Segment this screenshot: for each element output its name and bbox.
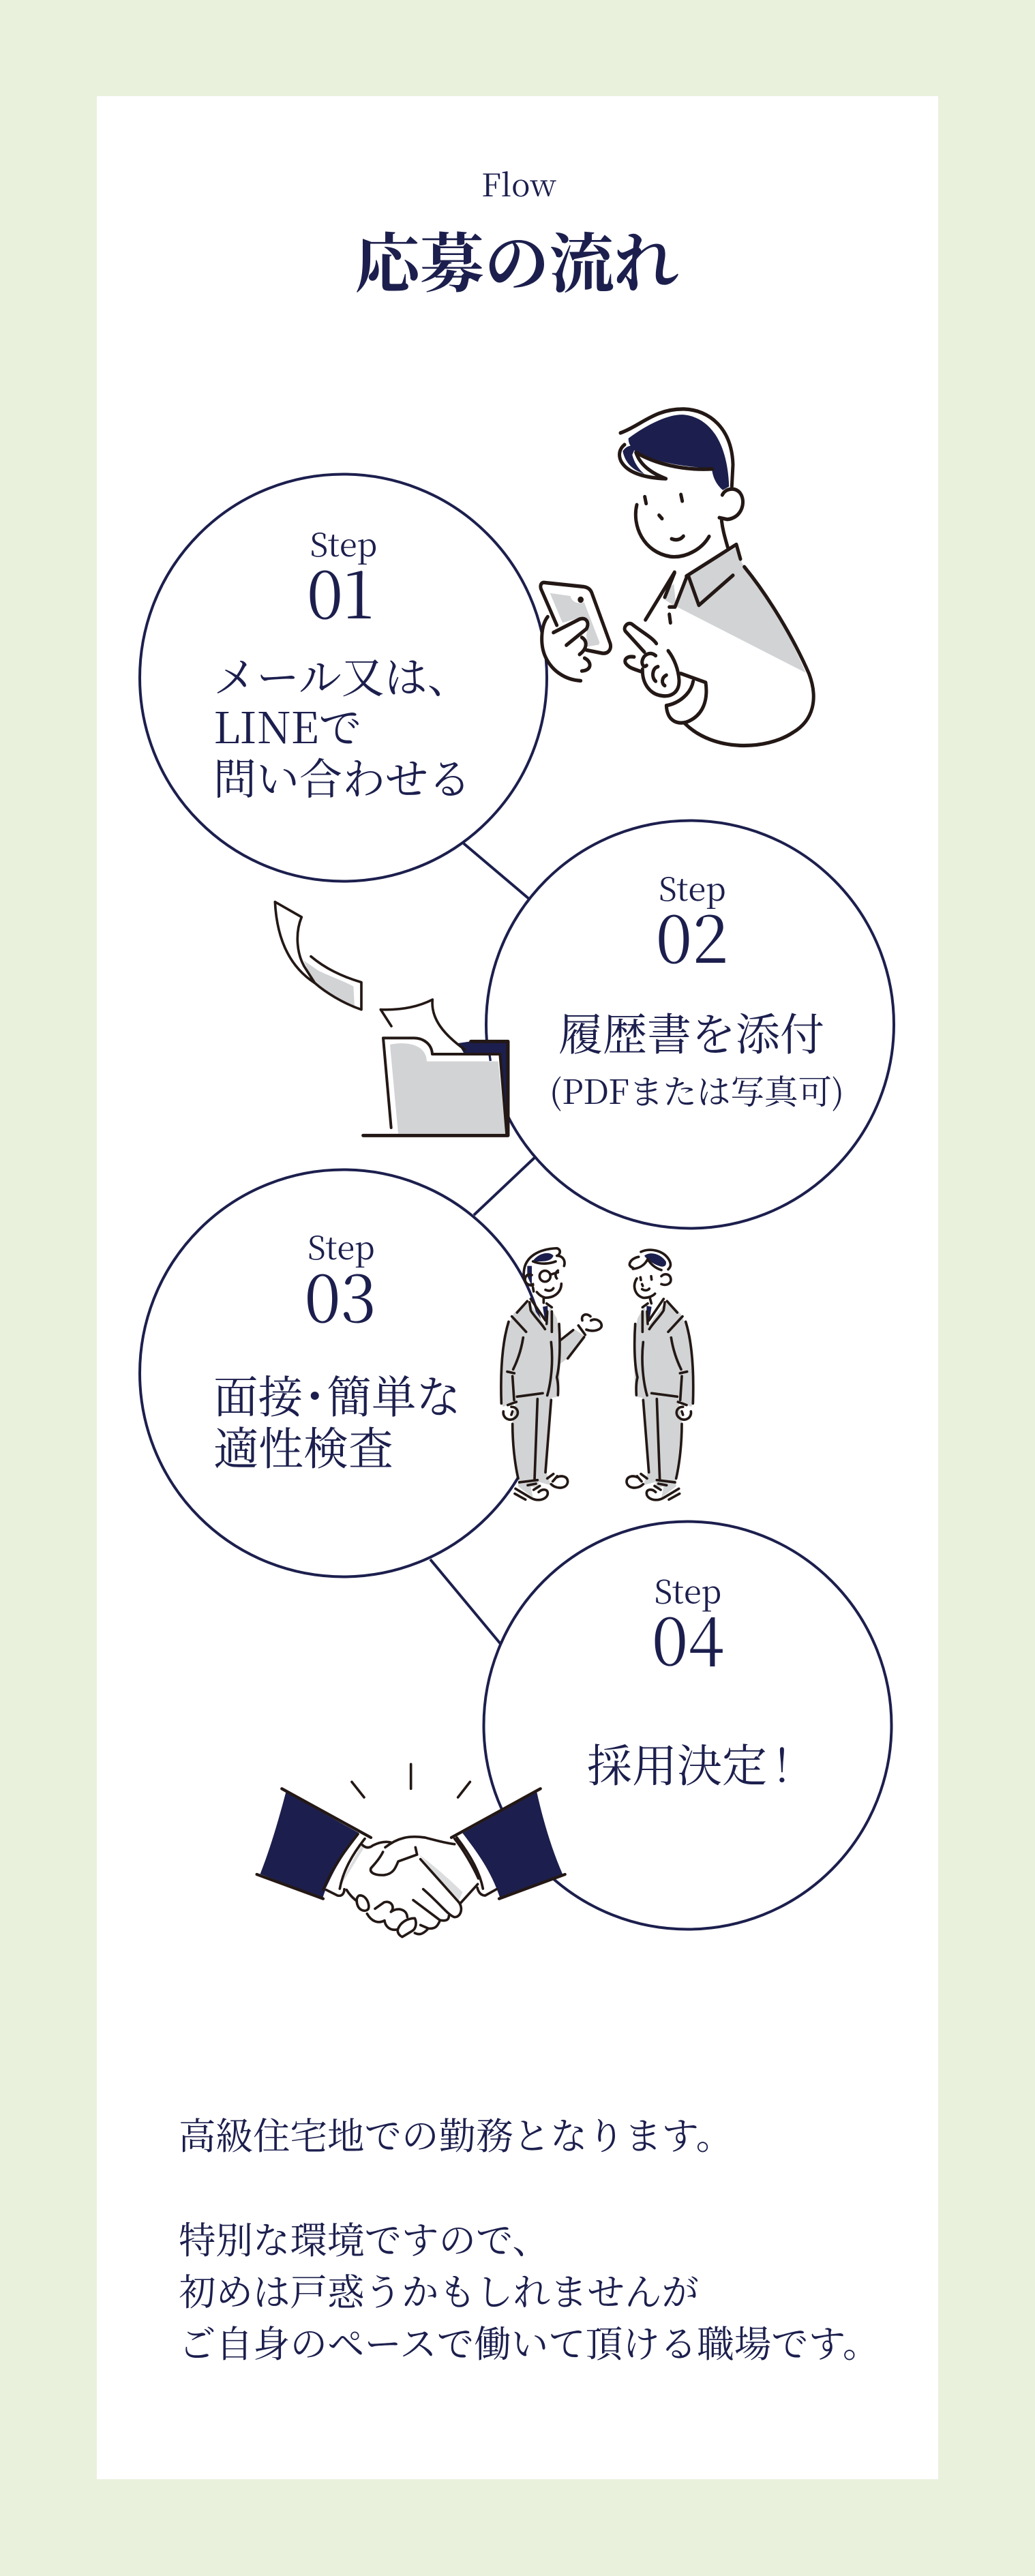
left man in suit bbox=[500, 1248, 601, 1500]
illustration: handshake bbox=[257, 1764, 565, 1938]
step 03 panel: 03 bbox=[305, 1248, 376, 1341]
step 04 panel: 採用決定！ bbox=[587, 1730, 805, 1795]
step 01 panel: Step bbox=[310, 520, 377, 566]
white card panel bbox=[97, 96, 938, 2479]
step 01 panel: LINEで bbox=[213, 694, 361, 756]
closing message: 特別な環境ですので、 bbox=[179, 2211, 550, 2264]
closing message: 高級住宅地での勤務となります。 bbox=[179, 2106, 733, 2160]
step 01 panel: 01 bbox=[307, 545, 374, 638]
step 02 panel: (PDFまたは写真可) bbox=[550, 1066, 844, 1114]
step 03 panel bbox=[140, 1170, 547, 1576]
illustration: two men in suits bbox=[500, 1248, 694, 1500]
step 02 panel: 履歴書を添付 bbox=[558, 999, 824, 1063]
illustration: flying paper sheet bbox=[275, 902, 361, 1010]
step 03 panel: 面接・簡単な bbox=[213, 1362, 461, 1426]
closing message: 初めは戸惑うかもしれませんが bbox=[179, 2262, 699, 2316]
step 02 panel: 02 bbox=[656, 889, 728, 982]
step 03 panel: 適性検査 bbox=[213, 1413, 393, 1478]
step 02 panel bbox=[486, 821, 894, 1229]
illustration: folder with document bbox=[363, 1000, 508, 1135]
eyebrow: Flow: Flow bbox=[481, 161, 557, 206]
step 01 panel: 問い合わせる bbox=[213, 745, 471, 807]
right man in suit bbox=[627, 1250, 694, 1500]
step 01 panel bbox=[140, 475, 547, 881]
step 01 panel: メール又は、 bbox=[213, 644, 470, 706]
step 03 panel: Step bbox=[308, 1223, 375, 1269]
closing message bbox=[179, 2106, 880, 2368]
illustration: man with smartphone bbox=[541, 409, 813, 745]
step 04 panel: Step bbox=[655, 1567, 721, 1613]
step 04 panel: 04 bbox=[652, 1591, 724, 1684]
step 02 panel: Step bbox=[659, 865, 726, 910]
closing message: ご自身のペースで働いて頂ける職場です。 bbox=[179, 2314, 880, 2368]
title: 応募の流れ bbox=[355, 213, 679, 305]
connector lines between steps bbox=[430, 843, 536, 1645]
step 04 panel bbox=[484, 1522, 892, 1930]
